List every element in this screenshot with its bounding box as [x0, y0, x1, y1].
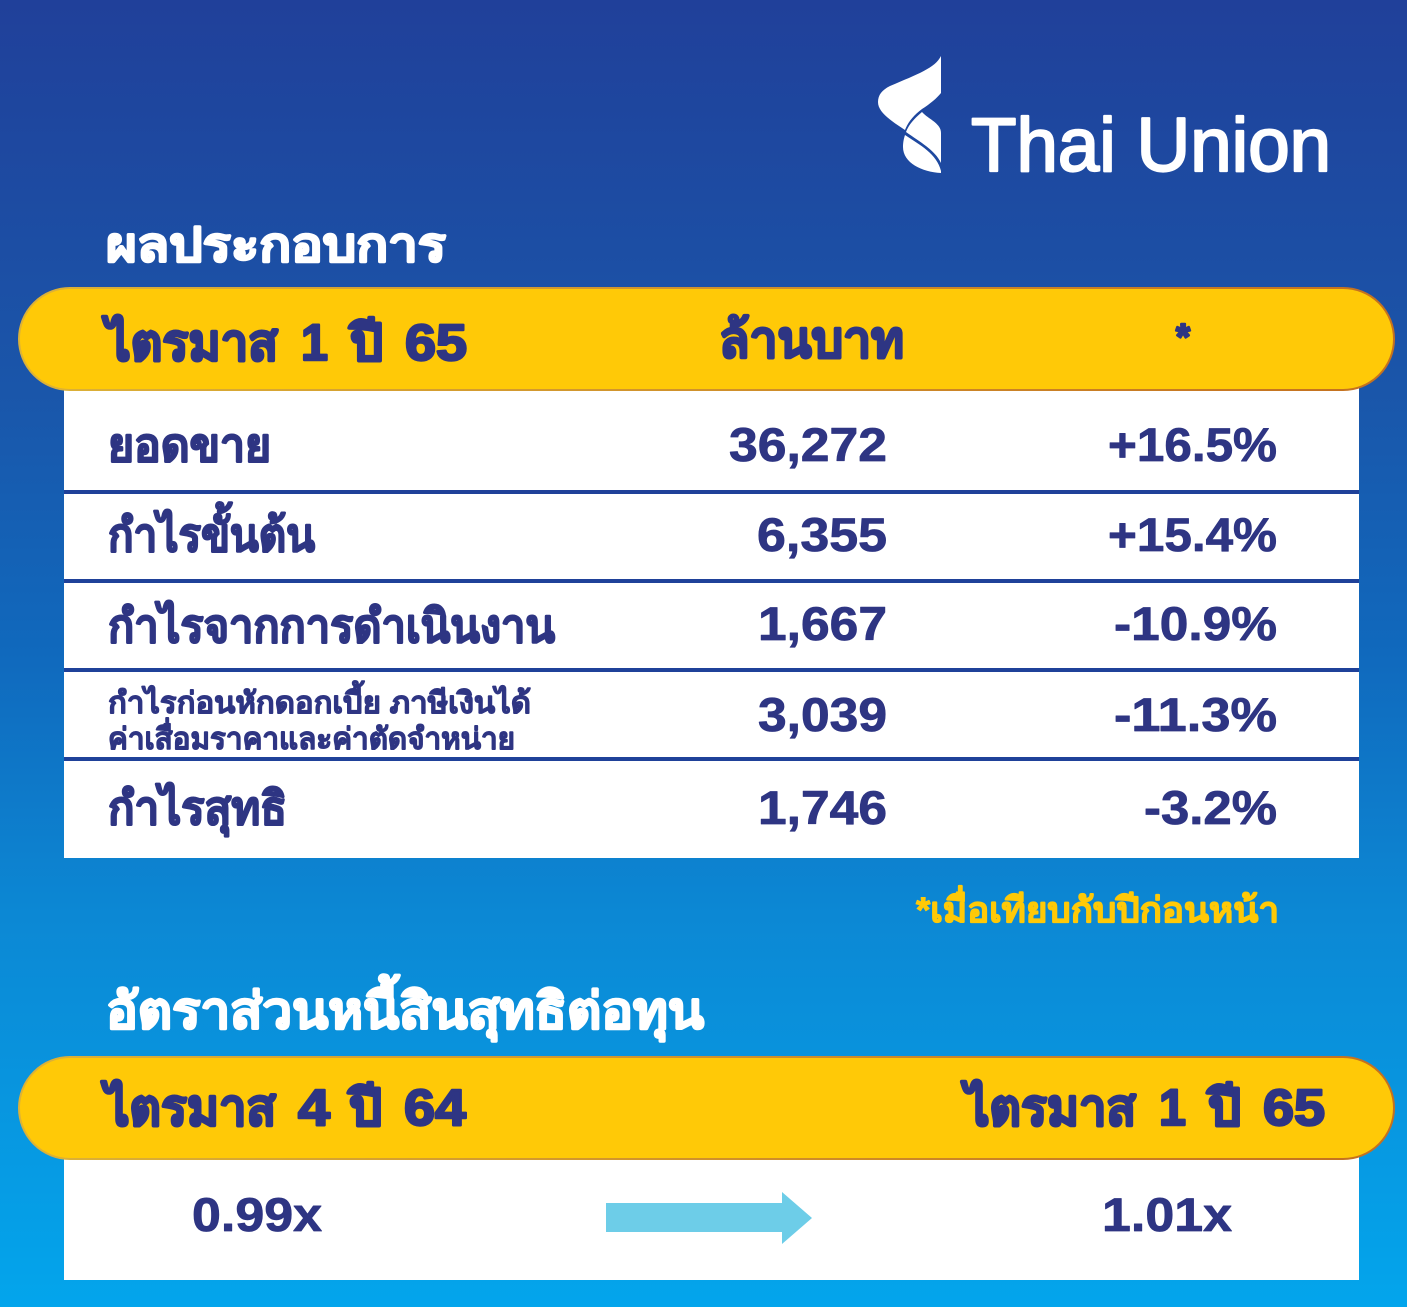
header: quarter: ปี	[348, 315, 383, 371]
header: quarter	[101, 314, 467, 371]
row: operating profit	[108, 597, 1277, 652]
panel: results header pill	[19, 288, 1394, 390]
row: EBITDA	[108, 680, 1277, 756]
panel: results table body	[64, 388, 1359, 858]
header: current quarter: ไตรมาส	[960, 1079, 1136, 1136]
footnote: *เมื่อเทียบกับปีก่อนหน้า	[916, 885, 1279, 930]
header: previous quarter: 4	[298, 1079, 331, 1136]
row: gross profit: +15.4%	[1108, 508, 1277, 561]
row: operating profit: กำไรจากการดำเนินงาน	[108, 600, 556, 652]
header: previous quarter: 64	[404, 1079, 467, 1136]
icon: arrow	[606, 1192, 812, 1244]
row: sales: +16.5%	[1108, 418, 1277, 471]
row: net profit: 1,746	[758, 781, 887, 834]
value: current ratio: 1.01x	[1102, 1188, 1232, 1241]
header: quarter: 1	[301, 314, 328, 371]
header: quarter: ไตรมาส	[101, 314, 278, 371]
logo wordmark: Thai Union	[971, 103, 1331, 188]
header: previous quarter: ไตรมาส	[100, 1079, 276, 1136]
header: previous quarter: ปี	[347, 1080, 382, 1136]
row: EBITDA: ค่าเสื่อมราคาและค่าตัดจำหน่าย	[108, 717, 515, 756]
row: net profit: กำไรสุทธิ	[108, 782, 287, 837]
heading: operating results: ผลประกอบการ	[106, 218, 446, 271]
row: EBITDA: -11.3%	[1114, 688, 1277, 741]
header: current quarter: 65	[1263, 1079, 1325, 1136]
logo: Thai Union	[878, 56, 1331, 188]
row: operating profit: 1,667	[758, 597, 887, 650]
panel: ratio table body	[64, 1157, 1359, 1280]
header: previous quarter	[100, 1079, 467, 1136]
row: net profit: -3.2%	[1144, 781, 1277, 834]
icon: logo mark	[878, 56, 941, 173]
header: current quarter: 1	[1159, 1079, 1186, 1136]
panel: ratio header pill	[19, 1057, 1394, 1159]
row: EBITDA: 3,039	[758, 688, 887, 741]
row: sales: 36,272	[729, 418, 887, 471]
heading: net debt to equity: อัตราส่วนหนี้สินสุทธิต่อทุน	[106, 974, 704, 1042]
row: gross profit: 6,355	[757, 508, 887, 561]
header: million baht: ล้านบาท	[719, 312, 904, 368]
header: current quarter	[960, 1079, 1325, 1136]
row: gross profit	[108, 501, 1277, 561]
header: quarter: 65	[405, 314, 467, 371]
row: operating profit: -10.9%	[1114, 597, 1277, 650]
row: sales	[108, 418, 1277, 471]
row: net profit	[108, 781, 1277, 837]
row: gross profit: กำไรขั้นต้น	[108, 501, 316, 561]
header: current quarter: ปี	[1206, 1080, 1241, 1136]
value: previous ratio: 0.99x	[192, 1188, 322, 1241]
row: EBITDA: กำไรก่อนหักดอกเบี้ย ภาษีเงินได้	[108, 680, 531, 720]
row: sales: ยอดขาย	[108, 419, 271, 471]
header: asterisk: *	[1176, 316, 1190, 357]
